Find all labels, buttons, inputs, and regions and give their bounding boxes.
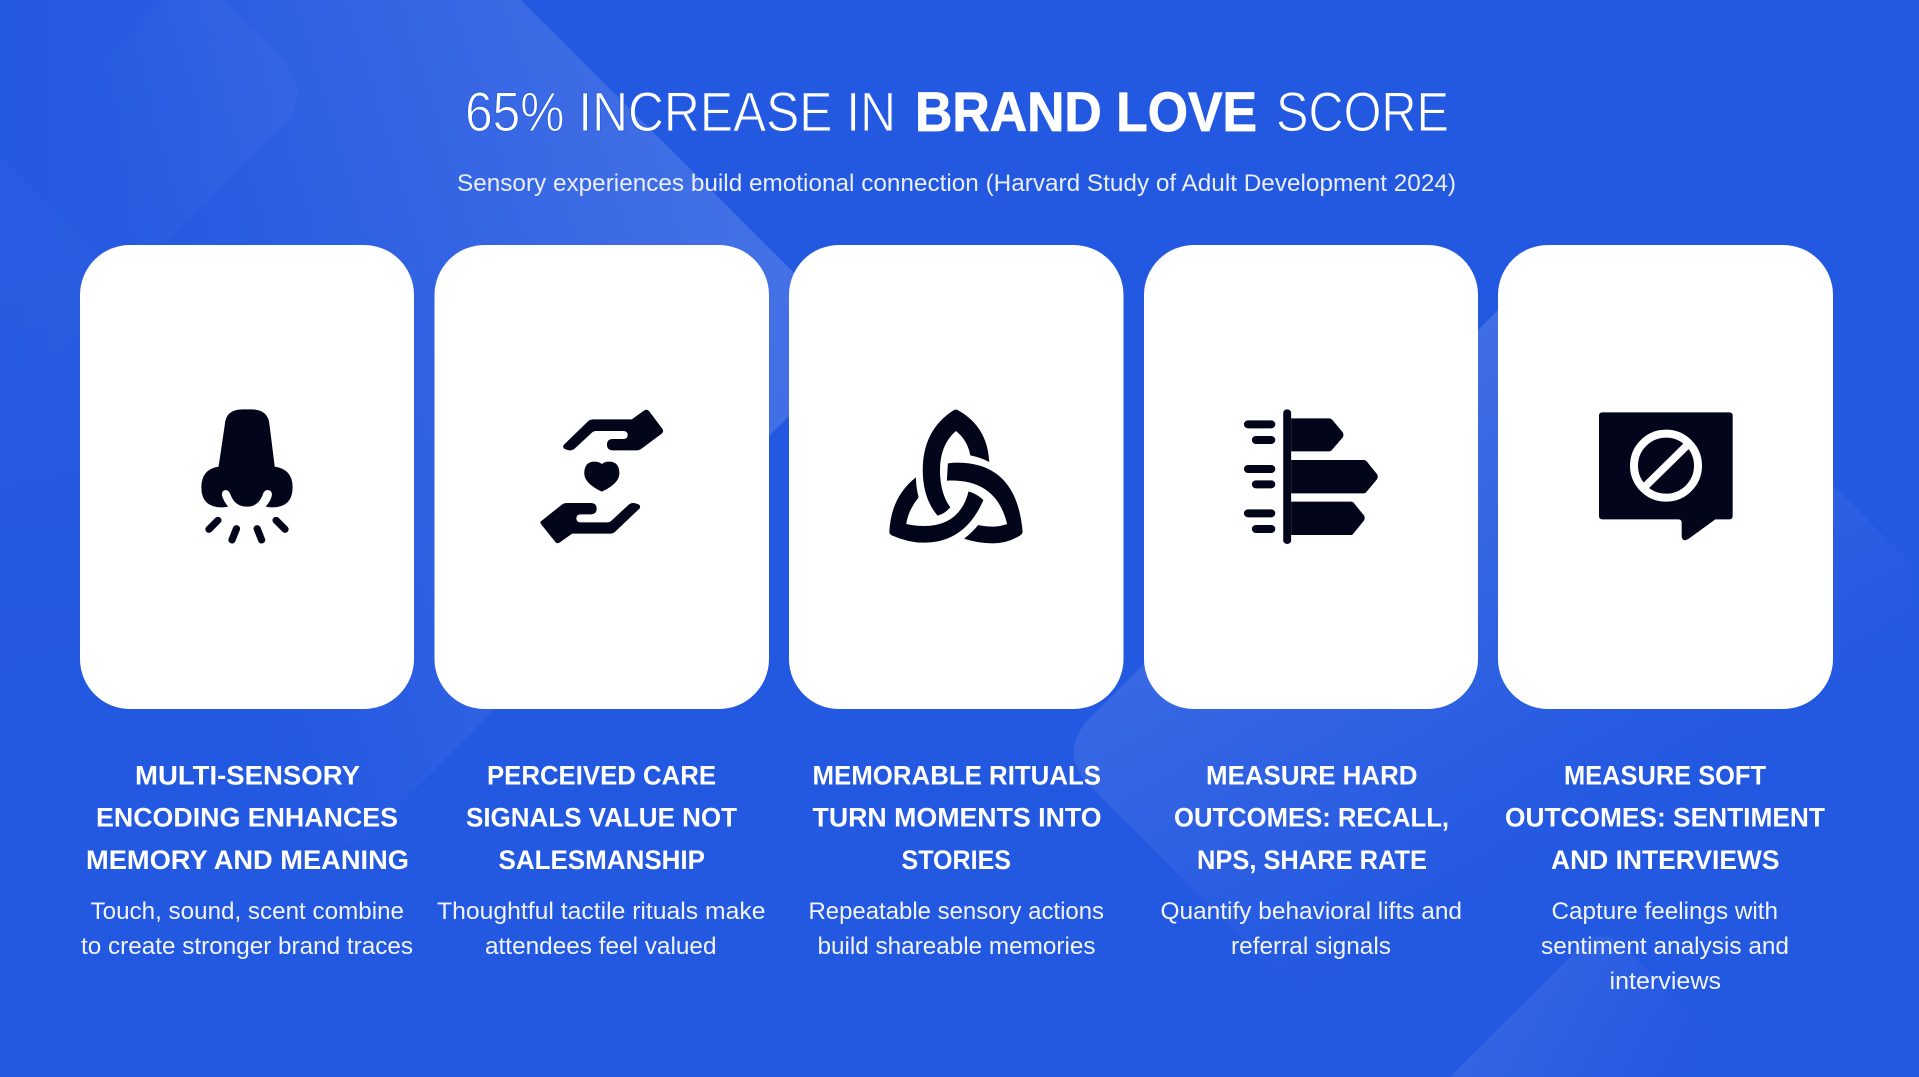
heading: MEMORY AND MEANING: [86, 845, 409, 875]
description: build shareable memories: [818, 933, 1096, 960]
heading: ENCODING ENHANCES: [96, 802, 398, 832]
description: Repeatable sensory actions: [808, 898, 1104, 925]
description: [1541, 898, 1789, 995]
heading: OUTCOMES: RECALL,: [1174, 802, 1449, 832]
card: [1498, 245, 1833, 709]
heading: SIGNALS VALUE NOT: [466, 802, 737, 832]
panel: perceived care: [434, 245, 769, 960]
description: [81, 898, 413, 960]
heading: NPS, SHARE RATE: [1197, 845, 1427, 875]
heading: MEASURE HARD: [1206, 760, 1418, 790]
description: [1160, 898, 1462, 960]
description: [808, 898, 1104, 960]
icon: hands and heart: [540, 410, 664, 544]
card: [80, 245, 414, 709]
heading: [86, 760, 409, 875]
heading: [812, 760, 1102, 875]
description: sentiment analysis and: [1541, 933, 1789, 960]
icon: signpost: [1244, 409, 1378, 544]
description: attendees feel valued: [485, 933, 716, 960]
heading: STORIES: [902, 845, 1011, 875]
panel: multi-sensory encoding: [80, 245, 414, 960]
description: to create stronger brand traces: [81, 933, 413, 960]
card: [789, 245, 1124, 709]
description: [437, 898, 766, 960]
description: Thoughtful tactile rituals make: [437, 898, 766, 925]
title: BRAND LOVE: [915, 80, 1257, 143]
card: [1144, 245, 1478, 709]
icon: speech bubble with prohibition sign: [1599, 412, 1733, 540]
heading: PERCEIVED CARE: [487, 760, 716, 790]
title: 65% INCREASE IN: [465, 80, 896, 143]
title: SCORE: [1276, 80, 1449, 143]
description: Touch, sound, scent combine: [90, 898, 404, 925]
panel: memorable rituals: [789, 245, 1124, 960]
heading: OUTCOMES: SENTIMENT: [1505, 802, 1825, 832]
heading: SALESMANSHIP: [498, 845, 705, 875]
heading: MEMORABLE RITUALS: [812, 760, 1101, 790]
heading: [1505, 760, 1825, 875]
icon: nose: [201, 409, 293, 544]
description: Quantify behavioral lifts and: [1160, 898, 1462, 925]
title: [465, 80, 1449, 143]
description: referral signals: [1231, 933, 1391, 960]
heading: [1174, 760, 1449, 875]
heading: AND INTERVIEWS: [1551, 845, 1780, 875]
panel: measure soft outcomes: [1498, 245, 1833, 995]
heading: TURN MOMENTS INTO: [812, 802, 1102, 832]
description: Capture feelings with: [1552, 898, 1778, 925]
description: interviews: [1610, 968, 1721, 995]
heading: MEASURE SOFT: [1564, 760, 1766, 790]
panel: measure hard outcomes: [1144, 245, 1478, 960]
icon: triquetra knot: [889, 410, 1023, 544]
heading: MULTI-SENSORY: [135, 760, 360, 790]
heading: [466, 760, 737, 875]
card: [434, 245, 769, 709]
subtitle: Sensory experiences build emotional connection (Harvard Study of Adult Development 2024): [457, 170, 1456, 197]
